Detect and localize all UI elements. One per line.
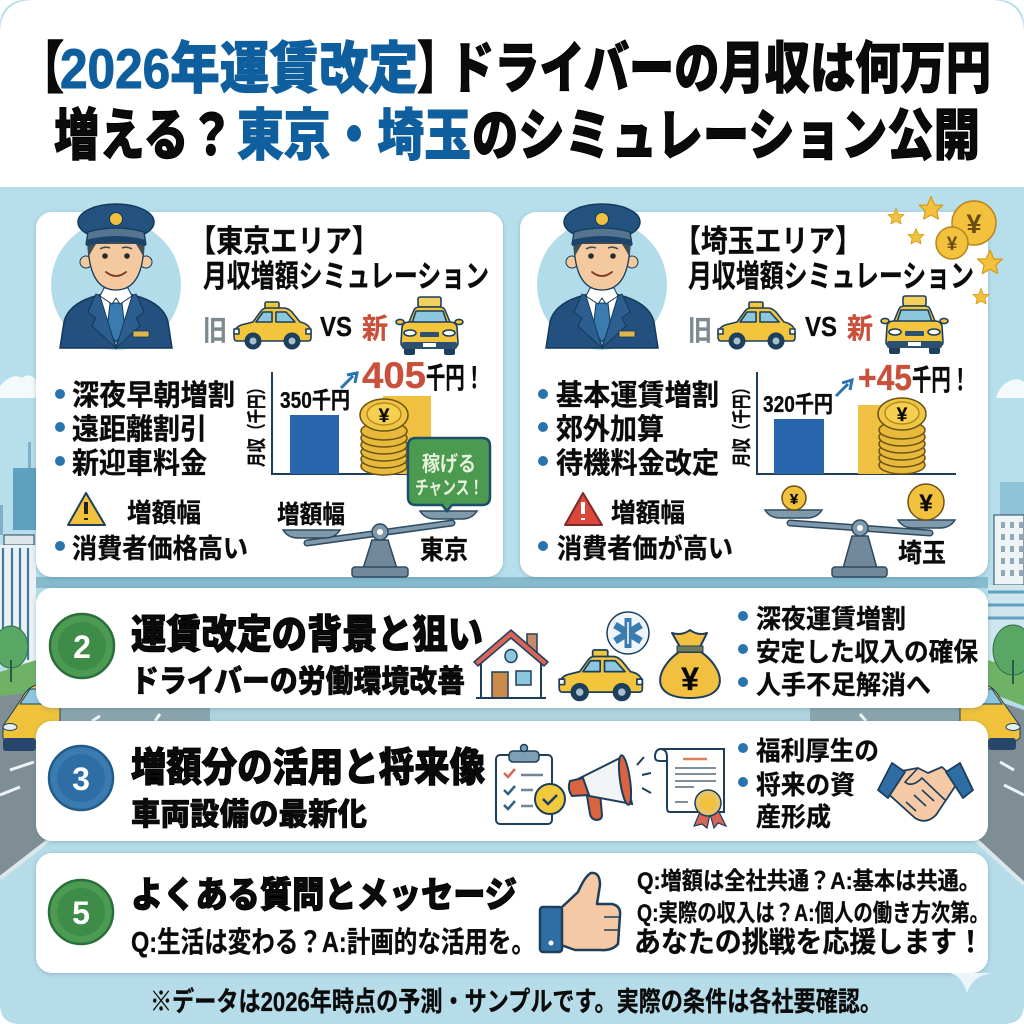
balance scale: Tokyo — [277, 501, 477, 577]
fare change list: 深夜早朝増割 — [72, 379, 235, 412]
old vs new taxis: VS — [320, 311, 352, 342]
header panel — [0, 0, 1024, 187]
fare change list: 新迎車料金 — [72, 447, 207, 480]
subheading: 車両設備の最新化 — [131, 797, 367, 832]
title: 】 — [417, 37, 459, 100]
warning text: 増額幅 — [127, 498, 201, 528]
badge 3 — [49, 746, 113, 810]
icon: megaphone — [569, 755, 651, 820]
heading: よくある質問とメッセージ — [131, 874, 517, 915]
fare change list: 郊外加算 — [556, 413, 664, 446]
warning text: 増額幅 — [611, 498, 685, 528]
old vs new taxis: 新 — [847, 313, 873, 344]
icon: clipboard — [496, 744, 565, 824]
FAQ answers and message: あなたの挑戦を応援します！ — [634, 926, 984, 959]
fare change list — [538, 379, 719, 480]
fare change list — [55, 379, 235, 480]
icon: handshake — [878, 763, 973, 821]
heading: Saitama: 【埼玉エリア】 — [674, 224, 862, 259]
callout: earning chance — [408, 438, 490, 511]
panel: FAQ and message — [36, 853, 989, 973]
bar chart: Tokyo: 405 — [362, 355, 426, 396]
old vs new taxis: 新 — [362, 313, 388, 344]
bar chart: Tokyo — [246, 355, 484, 475]
icon: warning triangle — [68, 493, 105, 525]
icon: house — [474, 630, 548, 698]
old vs new taxis: 旧 — [203, 315, 227, 346]
icon: money bag: ¥ — [681, 661, 699, 697]
footer note: ※データは2026年時点の予測・サンプルです。実際の条件は各社要確認。 — [150, 986, 882, 1017]
heading: 増額分の活用と将来像 — [131, 746, 485, 790]
bar chart: Saitama: 月収（千円） — [731, 380, 753, 467]
warning text: 消費者価格高い — [72, 534, 248, 564]
badge 2: 2 — [73, 629, 91, 665]
title: 東京・埼玉 — [237, 104, 471, 167]
panel: background and aims — [36, 588, 988, 708]
balance scale: Saitama: ¥ — [790, 491, 799, 508]
callout: earning chance: 稼げる — [422, 453, 476, 476]
title: 【 — [18, 37, 64, 100]
bullets — [738, 736, 879, 832]
bullets — [738, 604, 978, 700]
heading: Tokyo — [189, 224, 489, 294]
bar chart: Saitama: ¥ — [897, 405, 908, 426]
bullets: 将来の資 — [756, 770, 855, 800]
panel: Tokyo area — [36, 204, 503, 577]
heading: Saitama — [674, 224, 974, 294]
bullets: 産形成 — [756, 802, 831, 832]
balance scale: Saitama: 埼玉 — [898, 538, 946, 568]
balance scale: Saitama: ¥ — [919, 490, 933, 517]
warning text: 消費者価が高い — [557, 533, 733, 564]
badge 5 — [49, 880, 113, 944]
icon: Saitama driver — [537, 204, 667, 350]
heading: 運賃改定の背景と狙い — [131, 613, 483, 657]
badge 2 — [50, 614, 114, 678]
bar chart: Tokyo: 350千円 — [280, 387, 350, 413]
icon: thumbs up — [540, 873, 620, 952]
bar chart: Saitama: 320千円 — [763, 391, 833, 417]
warning text — [55, 498, 248, 564]
balance scale: Tokyo: 増額幅 — [277, 501, 345, 529]
fare change list: 待機料金改定 — [556, 447, 719, 480]
panel: Saitama area — [520, 196, 1002, 577]
icon: taxi — [559, 650, 642, 701]
icon: money bag — [660, 630, 720, 698]
icon: red warning triangle — [565, 493, 602, 525]
decoration: coins and stars: ¥ — [947, 234, 958, 255]
title: 2026年運賃改定 — [60, 37, 418, 100]
bar chart: Saitama: 千円！ — [912, 364, 970, 397]
old vs new taxis: 旧 — [688, 315, 712, 346]
old vs new taxis — [203, 297, 463, 355]
heading: Tokyo: 月収増額シミュレーション — [203, 259, 489, 294]
FAQ answers and message — [634, 868, 989, 959]
heading: Tokyo: 【東京エリア】 — [189, 224, 379, 259]
old vs new taxis: VS — [805, 311, 837, 342]
bar chart: Saitama — [731, 357, 970, 474]
decoration: coins and stars: ¥ — [966, 209, 982, 239]
bullets: 福利厚生の — [756, 736, 879, 766]
warning exclamation — [84, 502, 88, 520]
fare change list: 基本運賃増割 — [556, 379, 719, 412]
bar chart: Tokyo: ¥ — [379, 406, 390, 427]
icon: Tokyo driver — [51, 204, 181, 350]
warning exclamation — [581, 502, 585, 520]
bar chart: Tokyo: 月収（千円） — [246, 380, 268, 467]
icon: certificate — [655, 749, 726, 828]
callout: earning chance: チャンス！ — [415, 478, 483, 499]
bar chart: Tokyo: 千円！ — [426, 362, 484, 395]
balance scale: Saitama — [765, 484, 955, 577]
badge 3: 3 — [72, 761, 90, 797]
icon: medical symbol — [607, 612, 649, 654]
FAQ answers and message: Q:増額は全社共通？A:基本は共通。 — [637, 868, 980, 895]
bullets: 深夜運賃増割 — [756, 604, 906, 634]
question and answer: Q:生活は変わる？A:計画的な活用を。 — [131, 926, 535, 959]
bullets: 安定した収入の確保 — [756, 637, 978, 667]
title: 増える？ — [54, 104, 234, 167]
bullets: 人手不足解消へ — [756, 670, 931, 700]
subheading: ドライバーの労働環境改善 — [131, 664, 465, 699]
bar chart: Saitama: +45 — [858, 357, 912, 398]
warning text — [538, 498, 733, 564]
old vs new taxis — [688, 296, 948, 354]
fare change list: 遠距離割引 — [72, 413, 207, 446]
balance scale: Tokyo: 東京 — [420, 535, 468, 565]
badge 5: 5 — [72, 895, 90, 931]
panel: use of increase and future — [36, 721, 988, 841]
sparkle — [950, 973, 992, 993]
title — [18, 37, 991, 167]
decoration: coins and stars — [888, 196, 1002, 304]
